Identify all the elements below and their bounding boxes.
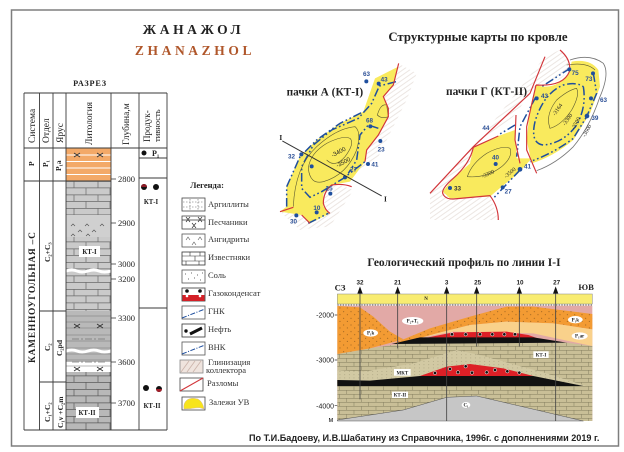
map A hydrocarbon contacts [287, 82, 396, 223]
title: Zhanazhol Cyrillic: ЖАНАЖОЛ [143, 22, 244, 37]
map G contour labels: -3500 [571, 116, 582, 131]
legend: faults [180, 378, 239, 391]
lithology labels: КТ-I [82, 249, 97, 256]
map G well labels: 39 [591, 115, 599, 122]
map A clay hatching [280, 64, 417, 230]
map A well labels: 63 [363, 71, 371, 78]
legend: reservoir clay: Глинизация [208, 357, 250, 367]
productivity markers: P₁ [152, 149, 160, 158]
map G well labels: 27 [505, 188, 512, 195]
legend: oil: Нефть [208, 324, 231, 334]
legend: limestone [182, 252, 251, 265]
legend: gas-oil contact: ГНК [208, 306, 225, 316]
map A well labels [288, 71, 388, 225]
map A well labels: 23 [378, 147, 385, 154]
column headers: тивность [152, 109, 162, 142]
profile strata labels: МКТ [397, 371, 409, 376]
profile heading: Геологический профиль по линии I-I [367, 257, 561, 269]
legend: faults: Разломы [207, 378, 239, 388]
map A section line I-I [279, 133, 387, 203]
map A well labels: 30 [290, 218, 298, 225]
map G contour labels: -3500 [503, 167, 518, 180]
geological profile: ЮВ [578, 282, 594, 292]
map A well labels: 10 [313, 205, 321, 212]
column headers: Система [28, 108, 38, 143]
legend: anhydrite [182, 234, 250, 247]
legend: reservoir clay: коллектора [206, 365, 246, 375]
map A contour labels: -3400 [331, 146, 348, 159]
age labels: P₁ [41, 160, 50, 167]
column headers: Литология [85, 101, 95, 145]
profile well numbers: 32 [356, 280, 364, 287]
profile strata labels: N [424, 297, 428, 302]
map G well labels: 41 [524, 164, 532, 171]
legend: mudstone: Аргиллиты [208, 199, 249, 209]
profile depth scale: -3000 [316, 358, 334, 365]
legend: sandstone: Песчаники [208, 217, 248, 227]
depth scale [111, 174, 135, 408]
legend: hydrocarbon deposits: Залежи УВ [209, 397, 250, 407]
age labels: C₁v +C₂m [56, 396, 65, 428]
map G well labels: 40 [492, 154, 500, 161]
map A faults [280, 63, 399, 223]
profile depth scale [316, 313, 337, 424]
profile depth scale: -2000 [316, 313, 334, 320]
legend: salt: Соль [208, 270, 226, 280]
map G title: пачки Г (КТ-II) [446, 86, 527, 98]
map A deposit [280, 67, 398, 223]
age labels: КАМЕННОУГОЛЬНАЯ –С [28, 231, 38, 363]
map G west deposit [443, 130, 532, 198]
column headers: Ярус [56, 123, 66, 143]
depth scale: 2800 [118, 174, 135, 184]
legend: hydrocarbon deposits [182, 397, 250, 410]
profile well numbers: 3 [445, 280, 449, 287]
map G well labels: 43 [541, 93, 549, 100]
map A wells [294, 79, 382, 217]
profile strata labels: КТ-II [394, 394, 406, 399]
map G clay hatching [430, 50, 570, 220]
legend [180, 180, 261, 410]
lithology labels: КТ-II [78, 410, 96, 417]
map G well labels: 44 [482, 125, 490, 132]
map A well labels: 68 [366, 117, 374, 124]
stratigraphic column [24, 93, 167, 430]
depth scale: 3700 [118, 398, 135, 408]
map G contour labels: -3300 [481, 169, 496, 180]
column headers [28, 101, 162, 145]
map G hydrocarbon contacts [493, 68, 597, 198]
map G well labels: 63 [600, 97, 608, 104]
legend: mudstone [182, 198, 249, 211]
map G well labels: 75 [572, 70, 579, 77]
column headers: Глубина,м [121, 103, 132, 145]
profile well numbers: 27 [553, 280, 561, 287]
map G contour labels: -3164 [552, 103, 564, 117]
productivity markers: КТ-II [143, 403, 161, 410]
map A well labels: 43 [381, 77, 388, 84]
profile well numbers: 25 [474, 280, 482, 287]
depth scale: 3200 [118, 274, 135, 284]
profile strata labels [363, 297, 588, 409]
legend: anhydrite: Ангидриты [208, 234, 250, 244]
lithology labels [76, 246, 100, 418]
productivity markers: КТ-I [144, 199, 159, 206]
legend: limestone: Известняки [208, 252, 251, 262]
map A well labels: 41 [371, 162, 379, 169]
legend: gas-oil contact [182, 306, 225, 319]
map A well labels: 27 [350, 167, 358, 174]
legend: gas condensate [182, 288, 261, 301]
map A section line I-I: I [279, 133, 282, 142]
age labels: P₁a [54, 160, 63, 171]
depth scale: 3300 [118, 313, 135, 323]
depth scale: 2900 [118, 218, 135, 228]
map G contour labels: -3300 [562, 113, 574, 127]
profile strata labels: P₁k [572, 318, 579, 323]
source credit: По Т.И.Бадоеву, И.В.Шабатину из Справочника, 1996г. с дополнениями 2019 г. [249, 433, 599, 443]
profile strata labels: P₂₊T₁ [407, 320, 419, 325]
map G well labels: 33 [454, 185, 462, 192]
map G faults [430, 50, 570, 220]
legend: salt [182, 270, 226, 283]
map G outer contour [537, 57, 606, 171]
age labels: C₂ [43, 343, 52, 351]
legend: oil [182, 324, 231, 337]
map A title: пачки А (КТ-I) [287, 86, 363, 98]
map G contour labels [481, 103, 593, 180]
profile strata [337, 294, 592, 421]
heading: section: РАЗРЕЗ [73, 79, 107, 88]
title: Zhanazhol Latin: ZHANAZHOL [135, 43, 255, 58]
map A well labels: 25 [326, 185, 333, 192]
age labels: C₁+C₂ [43, 402, 52, 422]
map G east deposit [527, 61, 600, 163]
profile well numbers [356, 280, 561, 287]
profile depth scale: м [329, 417, 334, 424]
profile strata labels: КТ-I [536, 353, 546, 358]
map: pack A (KT-I) [279, 63, 417, 230]
profile well numbers: 10 [516, 280, 524, 287]
profile strata labels: C₁ [463, 404, 469, 409]
legend: reservoir clay [180, 357, 250, 375]
age labels: C₂pd [55, 339, 64, 356]
age labels [27, 160, 65, 428]
profile gas markers [433, 333, 521, 375]
age labels: C₂+C₃ [43, 242, 52, 262]
legend: gas condensate: Газоконденсат [208, 288, 261, 298]
legend: water-oil contact [182, 342, 226, 355]
map A section line I-I: I [384, 194, 387, 203]
legend title: Легенда: [190, 180, 224, 190]
map A well labels: 32 [288, 154, 296, 161]
depth scale: 3000 [118, 259, 135, 269]
profile well numbers: 21 [394, 280, 402, 287]
column headers: Продук- [142, 110, 152, 142]
legend: water-oil contact: ВНК [208, 342, 226, 352]
productivity markers [141, 149, 162, 410]
profile strata labels: P₁ar [575, 335, 585, 340]
map G structure contours [548, 88, 578, 128]
map: pack A (KT-I): -3500 [335, 157, 352, 169]
profile direction labels: СЗ [335, 283, 346, 293]
map G wells [448, 67, 595, 190]
table grid [24, 93, 167, 430]
legend: sandstone [182, 216, 248, 229]
age labels: P [27, 161, 36, 166]
depth scale: 3600 [118, 357, 135, 367]
profile wells [357, 286, 558, 421]
map G well labels [454, 70, 608, 195]
column headers: Отдел [42, 118, 52, 143]
map G well labels: 73 [585, 76, 593, 83]
map: pack G (KT-II) [430, 50, 608, 220]
profile strata labels: P₁k [367, 332, 375, 337]
profile depth scale: -4000 [316, 403, 334, 410]
map G contour labels: -3600 [582, 124, 593, 138]
heading: structural maps: Структурные карты по кровле [388, 30, 568, 44]
map A structure contours [293, 127, 359, 207]
lithology column fill [66, 148, 111, 430]
geological profile [316, 257, 594, 424]
